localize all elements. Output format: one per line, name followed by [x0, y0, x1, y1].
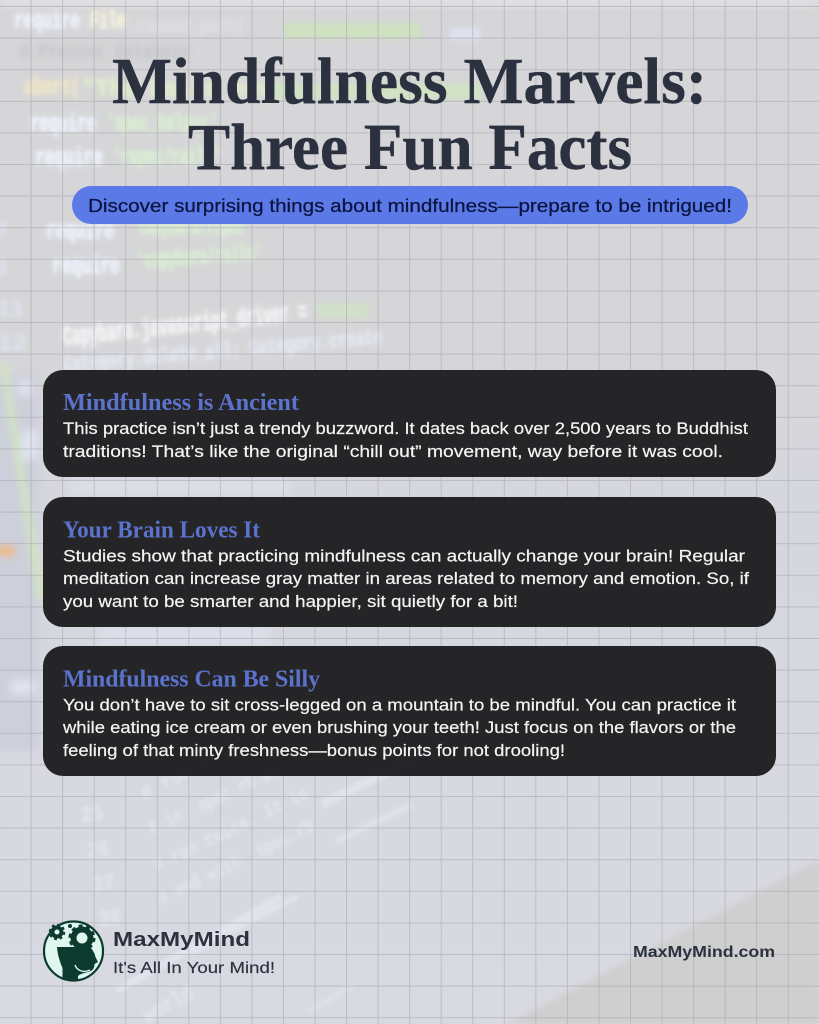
body text: This practice isn’t just a trendy buzzword. It dates back over 2,500 years to Buddhist	[63, 420, 748, 438]
background: # run twice. It is	[150, 783, 313, 878]
body text: traditions! That’s like the original “chill out” movement, way before it was cool.	[63, 443, 723, 461]
background: 26	[85, 837, 111, 865]
background: require	[35, 143, 103, 173]
background: abort(	[24, 75, 80, 102]
website: MaxMyMind.com	[633, 944, 775, 961]
background: # end with _spec.rb.	[155, 812, 327, 911]
title	[112, 45, 707, 184]
background: File	[90, 7, 126, 36]
background: 'capybara/rails'	[136, 240, 263, 276]
background: require	[30, 109, 96, 139]
body text: Studies show that practicing mindfulness can actually change your brain! Regular	[63, 548, 746, 566]
background: 28	[97, 905, 123, 933]
background: 27	[91, 871, 117, 899]
background: require	[46, 217, 114, 246]
background: 'rspec/rails'	[113, 145, 221, 172]
background: Capybara.javascript_driver =	[62, 299, 309, 354]
background: require	[14, 7, 80, 36]
background: 'spec_helper'	[106, 111, 218, 138]
title: Mindfulness Marvels:	[112, 45, 707, 118]
tagline: It's All In Your Mind!	[113, 960, 275, 977]
background: require	[52, 251, 120, 281]
brand name: MaxMyMind	[113, 929, 250, 951]
title: Three Fun Facts	[188, 111, 632, 184]
heading: Your Brain Loves It	[63, 516, 261, 544]
body text	[63, 548, 749, 611]
body text: feeling of that minty freshness—bonus points for not drooling!	[63, 742, 565, 760]
background: # run as	[137, 745, 227, 806]
background: 'capybara/rspec'	[132, 215, 252, 241]
background: # Prevent database	[20, 42, 190, 65]
heading: Mindfulness is Ancient	[63, 389, 300, 416]
heading: Mindfulness Can Be Silly	[63, 666, 321, 692]
panel: mindfulness is ancient	[43, 370, 776, 477]
icon: logo head with gears	[44, 922, 103, 981]
panel: mindfulness can be silly	[43, 646, 776, 776]
body text: while eating ice cream or even brushing your teeth! Just focus on the flavors or the	[62, 719, 736, 737]
background: "The Rails env	[82, 77, 272, 104]
background: .expand_path(	[127, 16, 245, 38]
body text: meditation can increase gray matter in areas related to memory and emotion. So, if	[63, 570, 749, 588]
background: 25	[79, 801, 105, 829]
body text	[62, 696, 736, 760]
subtitle pill: Discover surprising things about mindfulness—prepare to be intrigued!	[88, 196, 732, 216]
background: # in _spec.rb will	[145, 753, 300, 841]
subtitle pill	[72, 186, 748, 224]
body text	[63, 420, 748, 461]
background: Category.delete_all; Category.create	[62, 325, 383, 378]
body text: you want to be smarter and happier, sit quietly for a bit!	[63, 593, 518, 611]
panel: your brain loves it	[43, 497, 776, 627]
body text: You don’t have to sit cross-legged on a mountain to be mindful. You can practice it	[63, 696, 736, 714]
